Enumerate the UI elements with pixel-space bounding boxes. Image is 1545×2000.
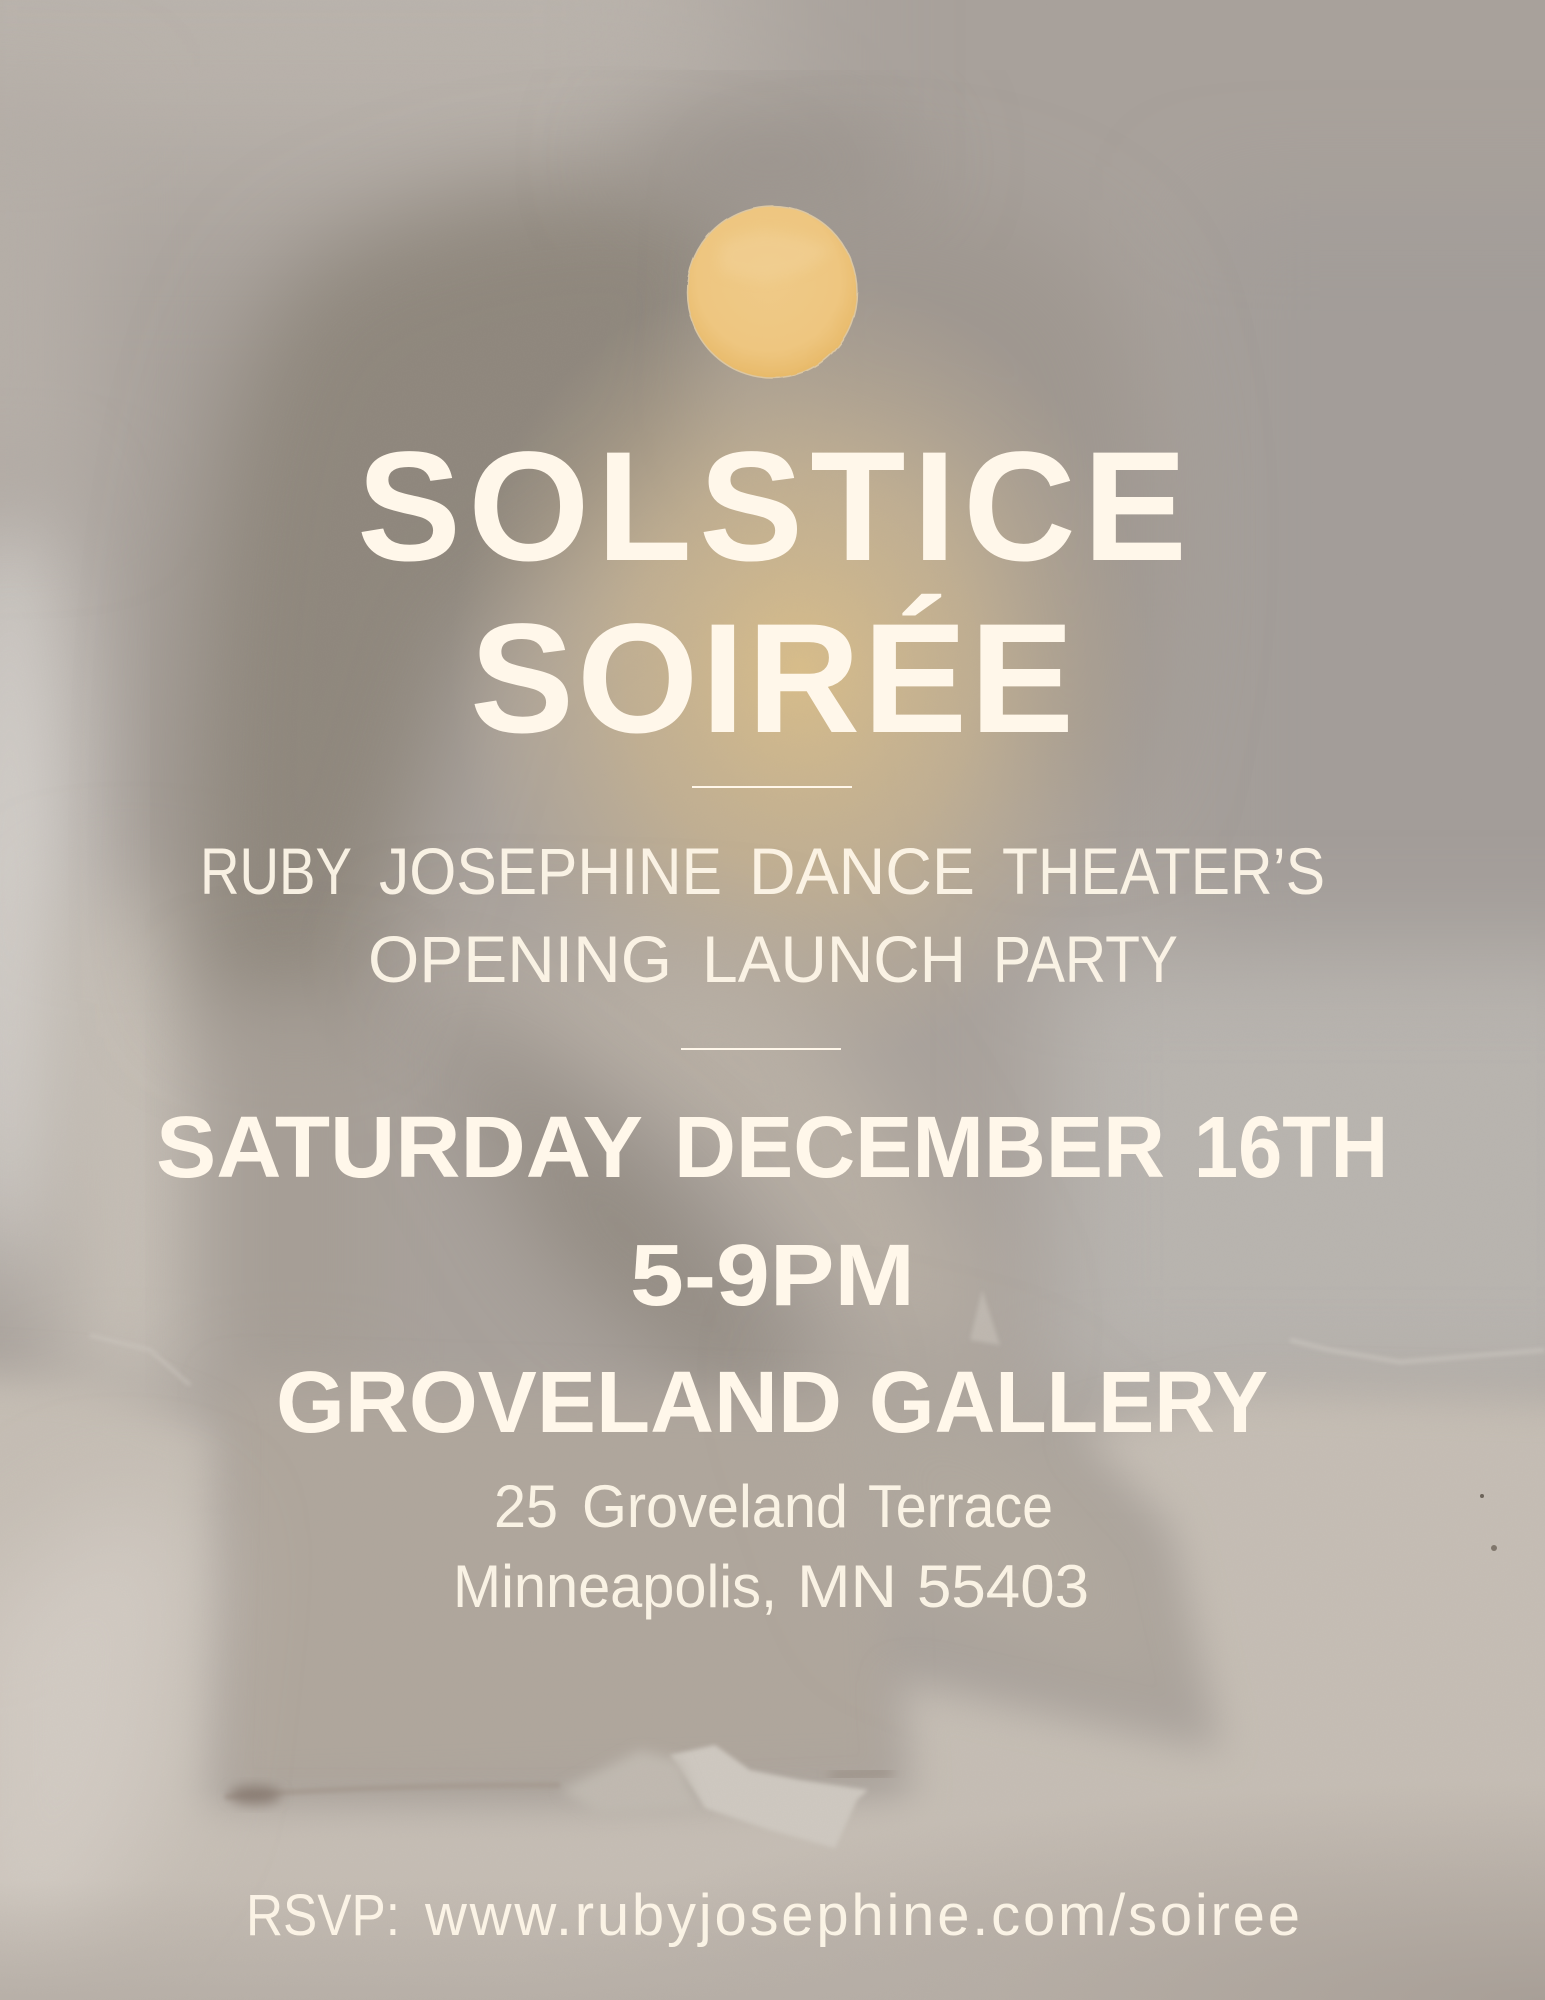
- title: SOIRÉE: [470, 592, 1074, 766]
- address: 25: [494, 1473, 558, 1540]
- event date, time and venue: GROVELAND: [276, 1354, 842, 1451]
- event date, time and venue: DECEMBER: [674, 1099, 1165, 1196]
- subtitle: DANCE: [749, 834, 975, 908]
- address: 55403: [917, 1553, 1089, 1620]
- event date, time and venue: 5-9PM: [630, 1227, 915, 1324]
- background: warm glow behind the title: [450, 270, 1150, 1070]
- subtitle: LAUNCH: [702, 922, 966, 996]
- address: MN: [797, 1553, 897, 1620]
- address: [453, 1473, 1089, 1620]
- title: [357, 420, 1187, 766]
- title: SOLSTICE: [357, 420, 1187, 594]
- event date, time and venue: SATURDAY: [156, 1099, 643, 1196]
- background: pale floor: [0, 1370, 1545, 2000]
- subtitle: PARTY: [993, 922, 1178, 996]
- background: knotted fabric on floor: [670, 1745, 868, 1848]
- background: dark arch of the figure: [188, 184, 760, 1050]
- subtitle: THEATER’S: [1002, 834, 1325, 908]
- address: Minneapolis,: [453, 1553, 777, 1620]
- subtitle: JOSEPHINE: [379, 834, 722, 908]
- subtitle: RUBY: [200, 834, 352, 908]
- address: Terrace: [868, 1473, 1053, 1540]
- subtitle: [200, 834, 1325, 996]
- rsvp link: RSVP:: [246, 1883, 400, 1948]
- event date, time and venue: 16TH: [1194, 1099, 1388, 1196]
- divider: [681, 1048, 841, 1050]
- event date, time and venue: GALLERY: [869, 1354, 1268, 1451]
- divider: [692, 786, 852, 788]
- subtitle: OPENING: [368, 922, 672, 996]
- icon: watercolour sun: [687, 206, 857, 378]
- address: Groveland: [582, 1473, 848, 1540]
- event date, time and venue: [156, 1099, 1388, 1451]
- background: upper centre fabric streaks: [380, 950, 1000, 1360]
- rsvp link: www.rubyjosephine.com/soiree: [424, 1883, 1300, 1948]
- background: lower body of figure: [222, 1380, 892, 1797]
